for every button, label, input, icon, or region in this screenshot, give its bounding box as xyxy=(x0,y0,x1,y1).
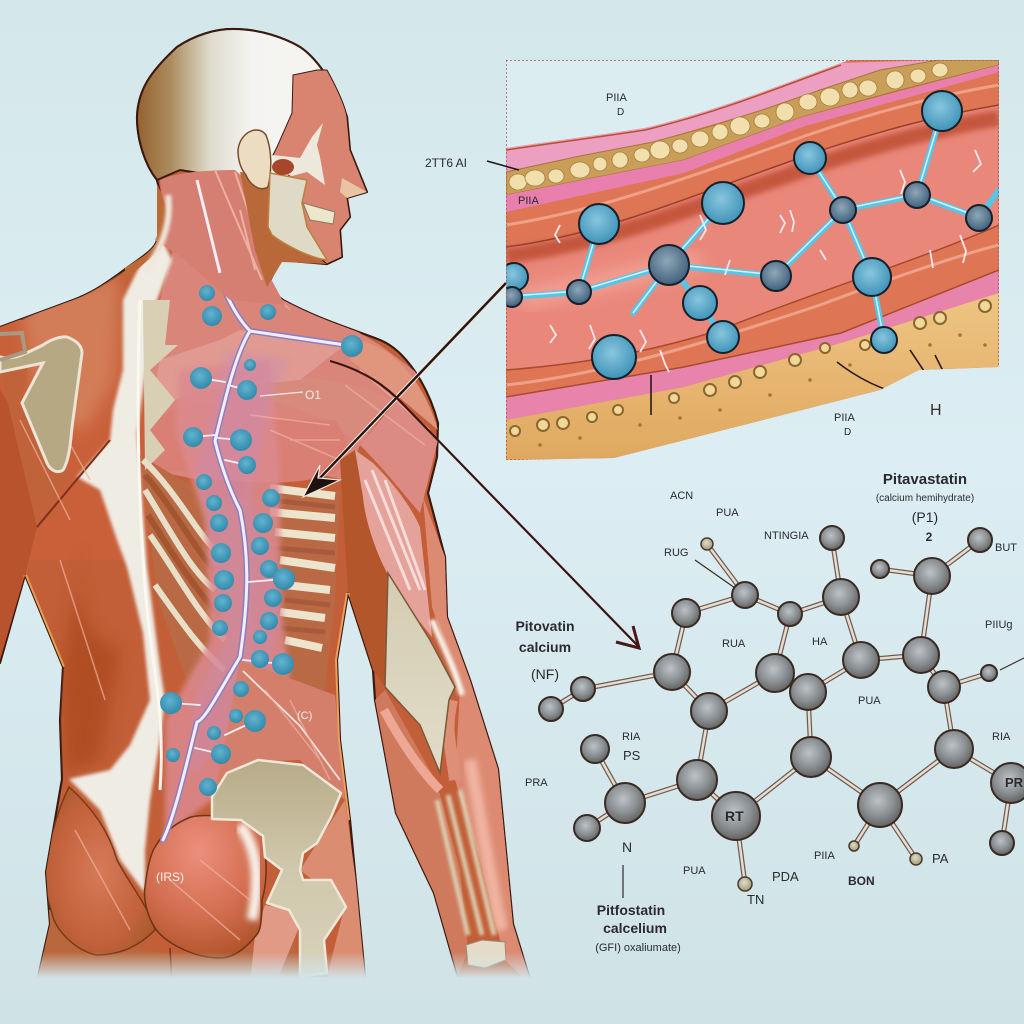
molecule labels: BON xyxy=(848,874,875,888)
molecule labels: PUA xyxy=(858,695,881,707)
inset leader lines xyxy=(651,350,955,415)
molecule labels: PUA xyxy=(683,865,706,877)
muscle shading xyxy=(0,230,532,986)
molecule labels: PUA xyxy=(716,507,739,519)
inset labels: 2TT6 AI xyxy=(425,156,467,170)
arrow: inset to body xyxy=(303,283,506,497)
heading: left compound xyxy=(515,618,575,682)
pelvis and femur bone xyxy=(212,760,346,977)
bonds xyxy=(551,538,1011,884)
inset labels: PIIA xyxy=(606,92,627,104)
sparks xyxy=(550,150,981,372)
atom labels: PR xyxy=(1005,775,1024,790)
left scapula bone xyxy=(0,333,82,472)
inset labels: D xyxy=(617,107,624,118)
labels on back: O1 and (C): O1 xyxy=(305,388,321,402)
atom labels: RT xyxy=(725,808,744,824)
figure: anatomical back and arm xyxy=(0,29,545,990)
inset label PIIA on band: PIIA xyxy=(518,195,539,207)
muscle striations xyxy=(20,280,430,940)
heading: bottom compound: Pitfostatin xyxy=(597,902,665,918)
molecule labels: PIIA xyxy=(814,850,835,862)
cyan bonds xyxy=(522,130,999,327)
teeth xyxy=(303,203,335,224)
lower back muscle xyxy=(215,660,345,800)
molecule diagram xyxy=(539,526,1024,891)
heading: left compound: Pitovatin xyxy=(515,618,575,634)
inset panel: artery cross-section xyxy=(500,60,1000,460)
cheek bone and eye socket xyxy=(272,123,325,185)
spine nerve line xyxy=(163,180,352,840)
ear xyxy=(238,130,271,189)
heading: top right compound: 2 xyxy=(926,530,933,544)
elbow bone xyxy=(385,573,455,773)
face muscle xyxy=(273,70,367,264)
blue receptor dots on back xyxy=(160,283,363,796)
fade at bottom of figure xyxy=(0,952,545,990)
heading: left compound: calcium xyxy=(519,639,571,655)
inset labels: H xyxy=(930,402,942,419)
inset labels xyxy=(425,92,942,438)
deltoid and arm muscle xyxy=(350,340,438,430)
heading: bottom compound xyxy=(595,865,681,954)
gluteal muscles xyxy=(45,787,155,955)
molecule labels: RIA xyxy=(992,731,1011,743)
wrist bones xyxy=(466,940,506,968)
small cream atoms xyxy=(701,538,922,891)
molecule labels: N xyxy=(622,839,632,855)
vessel lumen xyxy=(506,105,999,370)
atom labels xyxy=(725,775,1024,824)
edge highlight of torso xyxy=(337,593,350,820)
pink spinal column xyxy=(165,360,290,840)
vertebra and ribs xyxy=(140,455,340,690)
molecule labels: PRA xyxy=(525,777,548,789)
heading: top right compound: Pitavastatin xyxy=(883,471,967,488)
second pink band xyxy=(506,65,999,212)
inset labels: D xyxy=(844,427,851,438)
under-jaw muscle xyxy=(240,172,327,287)
molecule labels: RIA xyxy=(622,731,641,743)
nose xyxy=(340,178,367,198)
molecule labels: TN xyxy=(747,892,764,907)
molecule labels: NTINGIA xyxy=(764,530,809,542)
atoms xyxy=(539,526,1024,855)
molecule labels: RUG xyxy=(664,547,688,559)
molecule labels: PA xyxy=(932,851,949,866)
molecule labels: ACN xyxy=(670,490,693,502)
labels on back: O1 and (C) xyxy=(260,388,321,722)
molecule labels: RUA xyxy=(722,638,746,650)
forearm bones xyxy=(437,790,494,935)
inset border xyxy=(506,60,999,460)
inset labels: PIIA xyxy=(834,412,855,424)
cranium dome xyxy=(137,29,350,200)
heading: top right compound xyxy=(876,471,974,544)
head with exposed skull and face muscle xyxy=(125,29,367,305)
lower pink band xyxy=(506,270,999,420)
heading: bottom compound: calcelium xyxy=(603,920,667,936)
arrow: body to molecule xyxy=(330,361,639,648)
molecule labels: BUT xyxy=(995,542,1017,554)
molecule labels: PIIUg xyxy=(985,619,1013,631)
molecule labels xyxy=(525,490,1017,907)
top pink band xyxy=(506,60,850,148)
white back tendon band xyxy=(69,235,172,893)
thigh muscle xyxy=(38,909,298,976)
blue atoms xyxy=(500,91,992,379)
neck muscle xyxy=(155,170,285,305)
body silhouette xyxy=(0,29,532,986)
jaw bone and teeth xyxy=(268,173,327,260)
heading: top right compound: (P1) xyxy=(912,509,938,525)
labels on back: O1 and (C): (C) xyxy=(297,710,312,722)
heading: bottom compound: (GFI) oxaliumate) xyxy=(595,942,681,954)
heading: top right compound: (calcium hemihydrate) xyxy=(876,493,974,504)
lower fat layer xyxy=(506,293,999,460)
muscle layer xyxy=(505,60,1000,460)
upper back muscle xyxy=(150,252,416,479)
molecule labels: HA xyxy=(812,636,828,648)
molecule labels: PS xyxy=(623,748,641,763)
upper fat layer xyxy=(506,60,999,195)
molecule labels: PDA xyxy=(772,869,799,884)
label on gluteal: (IRS) xyxy=(156,870,184,884)
heading: left compound: (NF) xyxy=(531,666,559,682)
